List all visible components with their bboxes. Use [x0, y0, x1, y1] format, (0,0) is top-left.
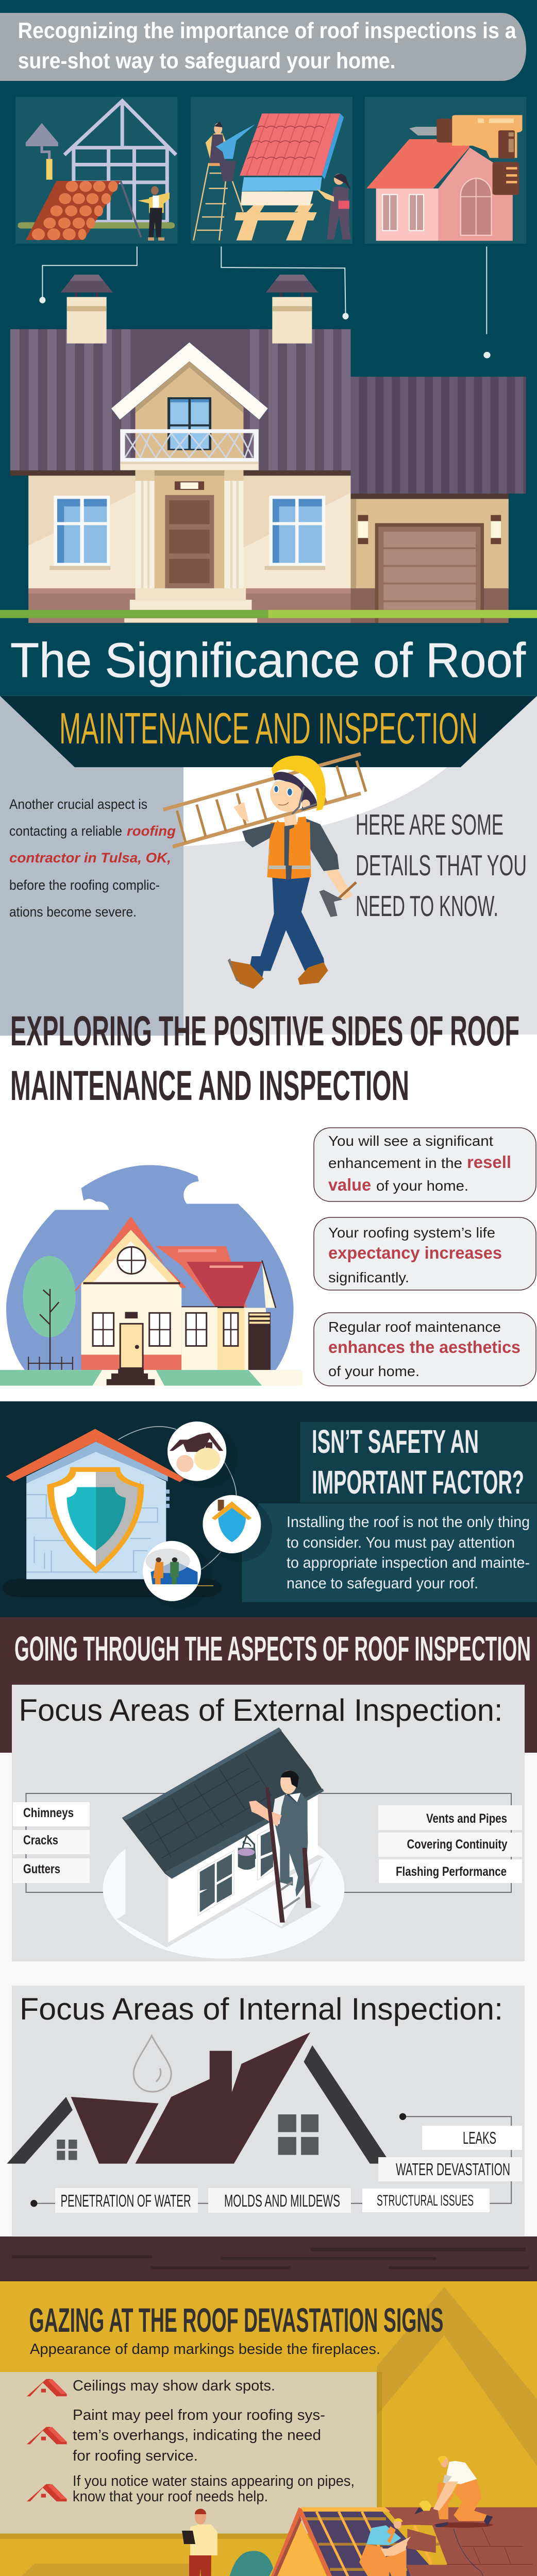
- label: water devastation: [378, 2157, 522, 2181]
- section: maintenance and inspection intro: [0, 696, 537, 1036]
- panel: tile roof layers illustration: [191, 97, 353, 244]
- card: resell value: You will see a significant: [328, 1133, 493, 1149]
- sign text list: Paint may peel from your roofing sys-: [73, 2407, 325, 2424]
- icon: roof 2: [27, 2427, 67, 2444]
- left labels: Gutters: [23, 1862, 60, 1876]
- safety text: nance to safeguard your roof.: [287, 1575, 478, 1592]
- panel: internal inspection: [7, 1986, 525, 2236]
- left intro text: Another crucial aspect is: [9, 796, 147, 812]
- left intro text: [9, 796, 176, 920]
- card: aesthetics: Regular roof maintenance: [328, 1319, 501, 1335]
- label: molds and mildews: [208, 2188, 351, 2213]
- card: life expectancy: significantly.: [328, 1269, 409, 1285]
- house illustration on blue circle: [0, 1142, 308, 1386]
- panel: external inspection: [12, 1685, 525, 1961]
- label: molds and mildews: MOLDS AND MILDEWS: [224, 2191, 340, 2210]
- safety text: to appropriate inspection and mainte-: [287, 1554, 530, 1571]
- panel: pink house with drill illustration: [365, 97, 526, 244]
- label: penetration of water: PENETRATION OF WATER: [61, 2191, 191, 2210]
- left labels: [13, 1802, 90, 1883]
- bushes: [211, 2551, 273, 2576]
- background panels: [0, 696, 537, 1036]
- worker with ladder: [163, 754, 366, 989]
- roof silhouette and water drop illustration: [7, 2032, 391, 2164]
- card: resell value: enhancement in the: [328, 1155, 462, 1171]
- card: resell value: resell: [467, 1153, 511, 1172]
- label: structural issues: STRUCTURAL ISSUES: [377, 2192, 474, 2209]
- sign text list: for roofing service.: [73, 2448, 198, 2464]
- card: aesthetics: [314, 1313, 536, 1386]
- card: life expectancy: [314, 1217, 536, 1290]
- shield house illustration: [3, 1421, 272, 1609]
- left intro text: before the roofing complic-: [9, 877, 160, 893]
- house and man on ladder illustration: [103, 1727, 344, 1959]
- section: roof devastation signs: [0, 2236, 537, 2576]
- internal heading: Focus Areas of Internal Inspection:: [20, 1992, 503, 2026]
- label: leaks: [422, 2126, 522, 2150]
- right labels: Covering Continuity: [407, 1837, 508, 1852]
- section: top hero with teal background: [0, 0, 537, 697]
- card: resell value: [314, 1128, 536, 1201]
- external heading: Focus Areas of External Inspection:: [19, 1693, 503, 1727]
- frame line: [26, 1793, 511, 1892]
- signs panel: [0, 2372, 382, 2539]
- section: positive sides of roof maintenance: [0, 1008, 536, 1386]
- label: structural issues: [362, 2189, 490, 2212]
- sign text list: tem’s overhangs, indicating the need: [73, 2427, 321, 2444]
- header banner: [0, 13, 526, 81]
- sign text list: If you notice water stains appearing on pipes,: [73, 2473, 355, 2489]
- safety text: to consider. You must pay attention: [287, 1534, 515, 1551]
- heading: [10, 1008, 519, 1109]
- left intro text: contacting a reliable: [9, 823, 122, 839]
- left intro text: roofing: [127, 823, 176, 839]
- safety text: [287, 1514, 530, 1592]
- panels: [242, 1422, 537, 1602]
- safety text: Installing the roof is not the only thing: [287, 1514, 530, 1531]
- chimney tops: [61, 275, 318, 298]
- right labels: Vents and Pipes: [426, 1811, 507, 1826]
- panel: framing and tiled roof illustration: [15, 97, 177, 244]
- brown band dashes: [12, 2248, 529, 2269]
- header banner: sure-shot way to safeguard your home.: [18, 48, 396, 73]
- sign text list: [73, 2378, 355, 2505]
- card: aesthetics: enhances the aesthetics: [328, 1337, 521, 1357]
- icon: roof 1: [27, 2379, 67, 2396]
- section: safety: [0, 1401, 537, 1617]
- roofers working on roof illustration: [258, 2456, 537, 2576]
- sign text list: know that your roof needs help.: [73, 2488, 268, 2505]
- card: aesthetics: of your home.: [328, 1363, 419, 1379]
- right labels: [378, 1805, 522, 1883]
- left intro text: contractor in Tulsa, OK,: [9, 850, 171, 866]
- connector lines and dots: [30, 2113, 511, 2207]
- left labels: Chimneys: [23, 1806, 74, 1820]
- signs subheading: Appearance of damp markings beside the fireplaces.: [30, 2341, 380, 2358]
- section: aspects of roof inspection: [0, 1617, 537, 2236]
- right labels: Flashing Performance: [396, 1865, 507, 1879]
- left intro text: ations become severe.: [9, 904, 137, 920]
- sign text list: Ceilings may show dark spots.: [73, 2378, 275, 2394]
- left labels: Cracks: [23, 1833, 58, 1848]
- label: penetration of water: [55, 2188, 198, 2213]
- card: resell value: value: [328, 1175, 371, 1194]
- card: life expectancy: expectancy increases: [328, 1243, 502, 1262]
- main title: The Significance of Roof: [10, 633, 526, 688]
- label: leaks: LEAKS: [463, 2128, 496, 2147]
- card: resell value: of your home.: [376, 1178, 468, 1194]
- lower trapezoid: [0, 2564, 206, 2576]
- icon: roof 3: [27, 2484, 67, 2501]
- right callout text: [356, 808, 527, 923]
- safety heading: [312, 1423, 524, 1501]
- main house illustration: [0, 297, 537, 623]
- card: life expectancy: Your roofing system’s life: [328, 1225, 495, 1241]
- background mountain: [377, 2287, 537, 2466]
- connector lines: [39, 246, 486, 334]
- inspector with clipboard: [182, 2509, 217, 2576]
